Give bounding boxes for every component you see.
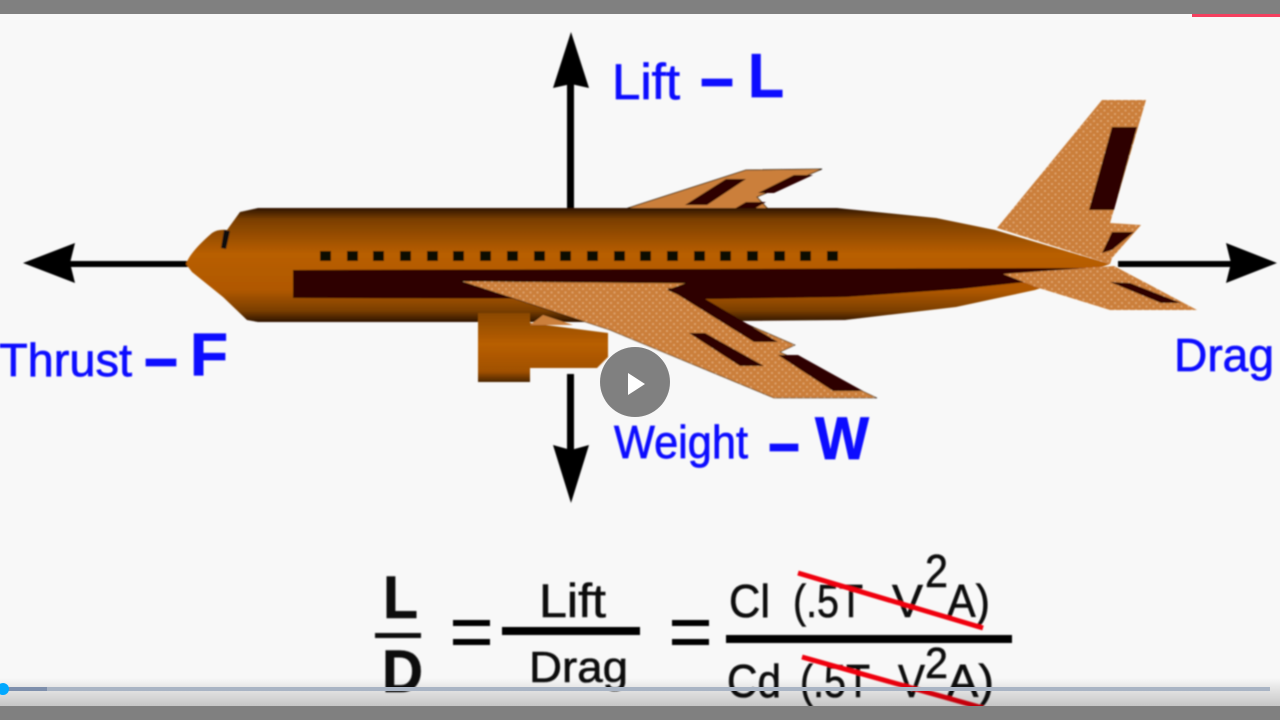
far wing <box>625 169 822 209</box>
label: weight <box>614 405 869 472</box>
Lift over Drag fraction: Drag <box>529 643 628 692</box>
numerator: Cl <box>729 575 770 627</box>
play button <box>600 347 670 417</box>
arrow: thrust <box>23 243 188 283</box>
bottom grey band <box>0 706 1280 720</box>
denominator: Cd <box>727 655 781 707</box>
windows <box>320 251 838 261</box>
L over D fraction: L <box>383 564 418 631</box>
label: thrust: Thrust <box>0 334 132 386</box>
main wing <box>460 281 877 398</box>
numerator: A) <box>947 575 990 627</box>
L over D fraction <box>375 564 423 705</box>
label: drag: Drag <box>1174 329 1274 381</box>
denominator: A) <box>947 655 994 707</box>
equals sign <box>672 620 709 645</box>
arrow: weight <box>553 374 589 503</box>
equals sign <box>453 620 490 645</box>
red strike numerator <box>798 573 983 628</box>
denominator <box>727 639 994 707</box>
label: lift: L <box>748 42 784 111</box>
airplane <box>186 100 1197 398</box>
fuselage <box>186 208 1110 322</box>
label: lift <box>612 42 784 111</box>
label: thrust <box>0 321 228 388</box>
label: weight: W <box>815 405 869 472</box>
denominator: (.5T <box>800 655 870 707</box>
Lift over Drag fraction: Lift <box>539 574 606 627</box>
red accent line <box>1192 14 1280 17</box>
denominator: V <box>898 655 925 707</box>
numerator: V <box>892 575 923 627</box>
progress bar <box>0 683 1270 695</box>
numerator: 2 <box>925 545 948 597</box>
vertical tail fin <box>997 100 1146 264</box>
coefficient fraction <box>726 545 1012 708</box>
fuselage stripe <box>293 268 1100 299</box>
label: thrust: F <box>190 321 228 388</box>
label: lift: Lift <box>612 54 680 110</box>
Lift over Drag fraction <box>502 574 640 692</box>
numerator: (.5T <box>793 575 863 627</box>
denominator: 2 <box>925 639 948 688</box>
lift to drag formula <box>375 545 1012 708</box>
red strike denominator <box>802 657 983 708</box>
label: weight: Weight <box>614 416 748 468</box>
bottom player gradient <box>0 678 1280 706</box>
engine <box>478 313 608 382</box>
L over D fraction: D <box>382 638 423 705</box>
top grey band <box>0 0 1280 14</box>
fraction bar <box>726 635 1012 643</box>
cockpit window <box>221 230 230 249</box>
arrow: lift <box>553 32 589 210</box>
numerator <box>729 545 990 627</box>
horizontal tail plane <box>1003 266 1197 310</box>
arrow: drag <box>1118 243 1277 283</box>
